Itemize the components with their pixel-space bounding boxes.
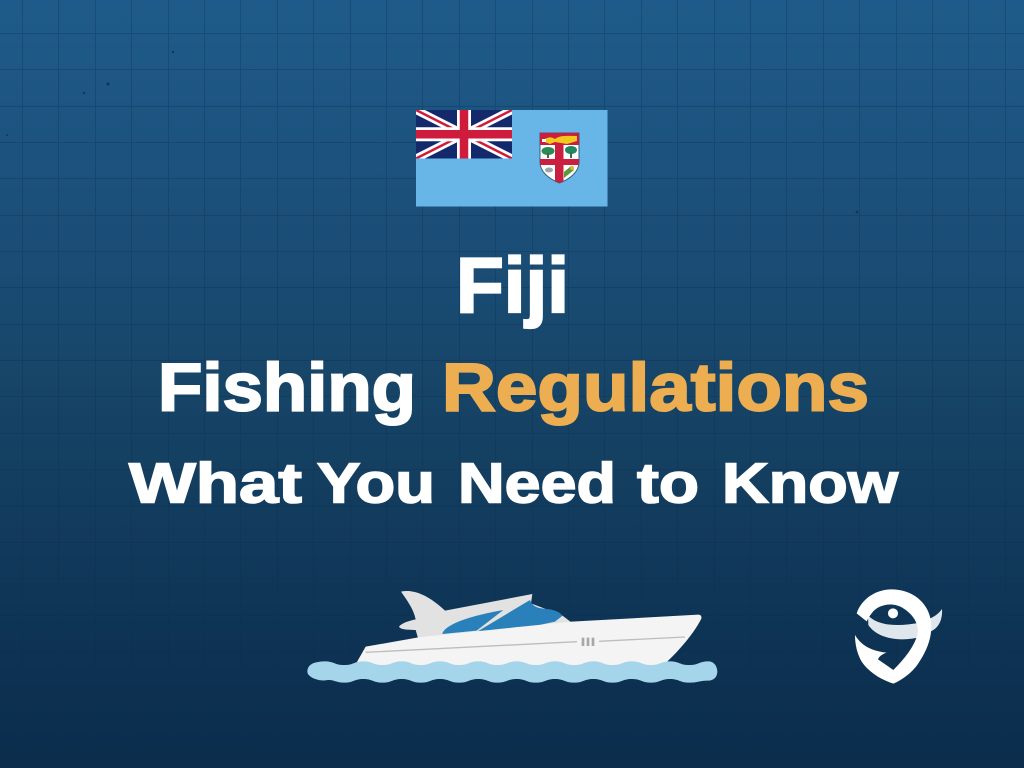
icon: motor yacht on waves [307, 591, 717, 683]
subtitle: What You Need to Know: Need [458, 452, 616, 516]
icon: fish hook logo [855, 589, 942, 684]
subtitle: What You Need to Know [129, 452, 899, 516]
subtitle: What You Need to Know: You [317, 452, 435, 516]
water waves [307, 661, 717, 683]
Fiji flag [416, 110, 608, 206]
Union Jack canton [416, 110, 512, 158]
logo band and tail [868, 609, 942, 639]
subtitle: What You Need to Know: What [129, 452, 302, 516]
coat of arms shield [540, 133, 579, 183]
cabin windows [442, 600, 563, 634]
logo body [855, 589, 931, 684]
yacht fin and cabin [399, 591, 572, 639]
word: Fishing: Fishing [158, 350, 416, 426]
word: Regulations: Regulations [442, 350, 869, 426]
hull stripe and vents [366, 637, 685, 652]
title: Fiji: Fiji [456, 241, 569, 329]
hull [353, 615, 701, 668]
heading: Fishing Regulations [158, 350, 869, 426]
logo eye [888, 608, 898, 618]
subtitle: What You Need to Know: to [637, 452, 699, 516]
subtitle: What You Need to Know: Know [722, 452, 899, 516]
